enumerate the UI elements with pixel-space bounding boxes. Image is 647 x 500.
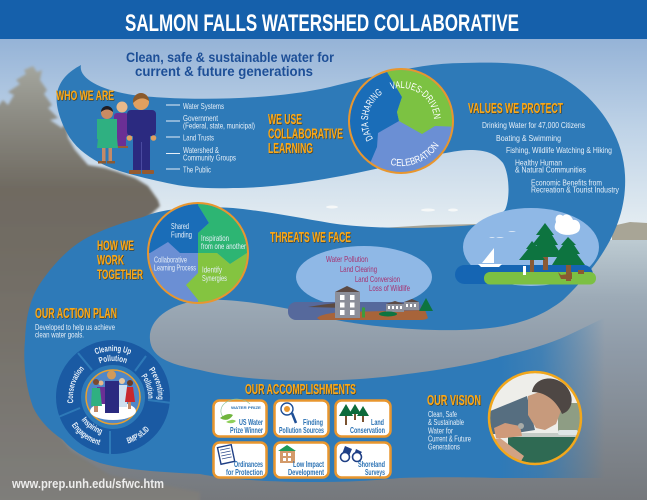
background: sky [0, 39, 647, 240]
list: values we protect: Drinking Water for 47,000 Citizens [482, 120, 585, 130]
icon: group of people [97, 93, 156, 174]
background: small clouds [326, 206, 458, 212]
wheel label: preventing pollution: Pollution [141, 373, 154, 398]
segment label: identify synergies: Synergies [202, 273, 227, 283]
heading: threats we face: THREATS WE FACE [270, 230, 351, 246]
card: finding pollution sources [274, 400, 328, 436]
text: vision statement: Current & Future [428, 434, 471, 444]
pine tree: rear [527, 223, 563, 270]
river: fading right end [499, 315, 610, 478]
list: who we are: (Federal, state, municipal) [183, 120, 255, 130]
list: who we are: Community Groups [183, 152, 236, 162]
list: values we protect: Boating & Swimming [496, 133, 561, 143]
threats list: Land Conversion [355, 274, 400, 284]
text: vision statement: & Sustainable [428, 417, 464, 427]
chart: action plan wheel [56, 340, 170, 454]
heading: we use collaborative learning: WE USE [268, 112, 302, 128]
label: data sharing: DATA SHARING [361, 89, 382, 142]
heading: our vision: OUR VISION [427, 393, 481, 409]
wheel label: cleaning up pollution: Cleaning Up [94, 345, 131, 356]
list: who we are [166, 101, 255, 174]
threats list: Water Pollution [326, 254, 368, 264]
icon: magnifier [281, 403, 296, 423]
list: values we protect: & Natural Communities [515, 164, 586, 174]
card: land conservation: Conservation [350, 425, 385, 435]
heading: we use collaborative learning: COLLABORATIVE [268, 126, 343, 142]
list: who we are: Watershed & [183, 145, 219, 155]
segment label: shared funding [171, 221, 192, 240]
photo: arm [495, 438, 524, 460]
segment label: shared funding: Shared [171, 221, 189, 231]
text: action plan description [35, 322, 115, 340]
card: finding pollution sources: Pollution Sources [279, 425, 324, 435]
photo: fountain [508, 437, 576, 463]
wheel centre: people [86, 370, 140, 424]
list: who we are: Water Systems [183, 101, 224, 111]
heading: how we work together: WORK [97, 252, 124, 268]
background: far shoreline [365, 222, 647, 240]
card: land conservation: Land [371, 417, 384, 427]
list: values we protect: Fishing, Wildlife Watching & Hiking [506, 145, 612, 155]
card: shoreland surveys: Shoreland [358, 459, 385, 469]
small buildings [386, 299, 419, 312]
segment label: inspiration: from one another [201, 241, 246, 251]
illustration: threats scene [288, 246, 433, 320]
threats list: Loss of Wildlife [369, 283, 410, 293]
segment label: identify synergies [202, 264, 227, 283]
far hill [308, 302, 346, 308]
label: values-driven: VALUES-DRIVEN [390, 81, 441, 119]
heading: our action plan: OUR ACTION PLAN [35, 305, 117, 322]
icon: document [217, 445, 235, 464]
card: ordinances for protection: for Protection [226, 467, 263, 477]
wheel label: preventing pollution: Preventing [149, 366, 164, 400]
photo: jacket [488, 396, 535, 434]
photo: white jug [558, 430, 578, 435]
list: values we protect: Recreation & Tourist Industry [531, 184, 620, 194]
large building [335, 286, 360, 318]
illustration: lake scene with trees and sailboat [455, 208, 599, 286]
text: action plan description: Developed to help us achieve [35, 322, 115, 332]
icon: water prize logo: WATER PRIZE [231, 406, 262, 410]
wheel label: cleaning up pollution [94, 345, 131, 364]
shoreline strip [288, 302, 423, 320]
list: values we protect [482, 120, 620, 194]
heading: we use collaborative learning: LEARNING [268, 141, 313, 157]
sailboat [478, 248, 502, 267]
heading: we use collaborative learning [268, 112, 343, 157]
person: man in suit [127, 93, 156, 174]
segment label: shared funding: Funding [171, 230, 192, 240]
tagline [126, 50, 335, 79]
card: low impact development: Development [288, 467, 324, 477]
heading: values we protect: VALUES WE PROTECT [468, 101, 563, 117]
segment label: collaborative learning process: Collaborative [154, 254, 187, 264]
birds [489, 231, 516, 238]
card: ordinances for protection [214, 442, 266, 478]
pine tree: left [519, 241, 545, 272]
wheel label: inspiring engagement: Engagement [72, 422, 100, 445]
card: shoreland surveys [336, 442, 390, 478]
list: values we protect: Economic Benefits from [531, 178, 602, 188]
background: lake water [0, 240, 647, 500]
photo: boy drinking from fountain [488, 372, 583, 466]
segment: shared funding [149, 204, 209, 253]
wheel label: conservation: Conservation [67, 366, 84, 404]
threats list: Land Clearing [340, 264, 377, 274]
segment label: inspiration: Inspiration [201, 233, 229, 243]
header bar [0, 0, 647, 39]
photo: face [528, 390, 562, 430]
tagline: Clean, safe & sustainable water for [126, 50, 335, 65]
url: www.prep.unh.edu/sfwc.htm [11, 476, 164, 491]
list: who we are: Government [183, 113, 218, 123]
water strip [455, 265, 593, 284]
wheel label: inspiring engagement: Inspiring [82, 416, 102, 436]
segment: values-driven [387, 70, 452, 134]
ground [317, 310, 428, 320]
heading: who we are: WHO WE ARE [56, 87, 114, 103]
pine tree: right [552, 237, 585, 281]
text: action plan description: clean water goals. [35, 330, 84, 340]
wheel segment gaps [56, 353, 172, 457]
background: evergreen tree silhouette [0, 66, 200, 500]
segment: inspiration [198, 204, 247, 264]
photo: spout [518, 423, 524, 429]
list: who we are: The Public [183, 164, 212, 174]
card: us water prize winner: US Water [239, 417, 263, 427]
icon: trees [339, 404, 369, 425]
chart: how we work together circle [147, 202, 249, 304]
shrub [379, 312, 397, 316]
card: us water prize winner [214, 399, 266, 436]
threats list [326, 254, 410, 293]
text: vision statement: Clean, Safe [428, 409, 457, 419]
figure [362, 307, 365, 318]
lighthouse post [523, 266, 526, 275]
segment: data sharing [350, 72, 402, 162]
segment label: collaborative learning process: Learning Process [154, 262, 196, 272]
segment label: inspiration [201, 233, 246, 251]
heading: how we work together: TOGETHER [97, 266, 143, 282]
wheel label: cleaning up pollution: Pollution [98, 354, 127, 364]
photo: background foliage [558, 403, 580, 432]
deer [558, 270, 584, 279]
river shape [24, 63, 625, 482]
card: us water prize winner: Prize Winner [230, 425, 263, 435]
card: land conservation [336, 400, 390, 436]
cloud [555, 214, 580, 235]
card: low impact development [274, 442, 328, 478]
icon: house [278, 445, 296, 463]
card: ordinances for protection: Ordinances [234, 459, 263, 469]
photo: hair [532, 378, 572, 414]
card: finding pollution sources: Finding [303, 417, 323, 427]
segment label: identify synergies: Identify [202, 264, 223, 274]
person: teal dress [97, 106, 118, 164]
heading: how we work together: HOW WE [97, 237, 134, 253]
photo: hand [494, 423, 522, 438]
segment label: collaborative learning process [154, 254, 196, 272]
pine tree [419, 298, 433, 311]
card: shoreland surveys: Surveys [365, 467, 385, 477]
icon: binoculars [340, 446, 362, 462]
heading: how we work together [97, 237, 143, 282]
text: vision statement: Water for [428, 426, 453, 436]
list: values we protect: Healthy Human [515, 158, 562, 168]
tagline: current & future generations [135, 64, 313, 79]
chart: collaborative learning circle [348, 68, 454, 174]
text: vision statement [428, 409, 471, 452]
label: celebration: CELEBRATION [391, 142, 439, 166]
person: purple [114, 102, 128, 148]
segment: synergies [186, 253, 247, 302]
wheel label: preventing pollution [141, 366, 164, 400]
list: who we are: Land Trusts [183, 132, 214, 142]
grass [484, 272, 596, 284]
card: low impact development: Low Impact [293, 459, 324, 469]
list connector lines [166, 105, 180, 169]
wheel label: bmps lid: BMP's/LID [126, 426, 149, 444]
heading: our accomplishments: OUR ACCOMPLISHMENTS [245, 382, 356, 398]
text: vision statement: Generations [428, 442, 460, 452]
